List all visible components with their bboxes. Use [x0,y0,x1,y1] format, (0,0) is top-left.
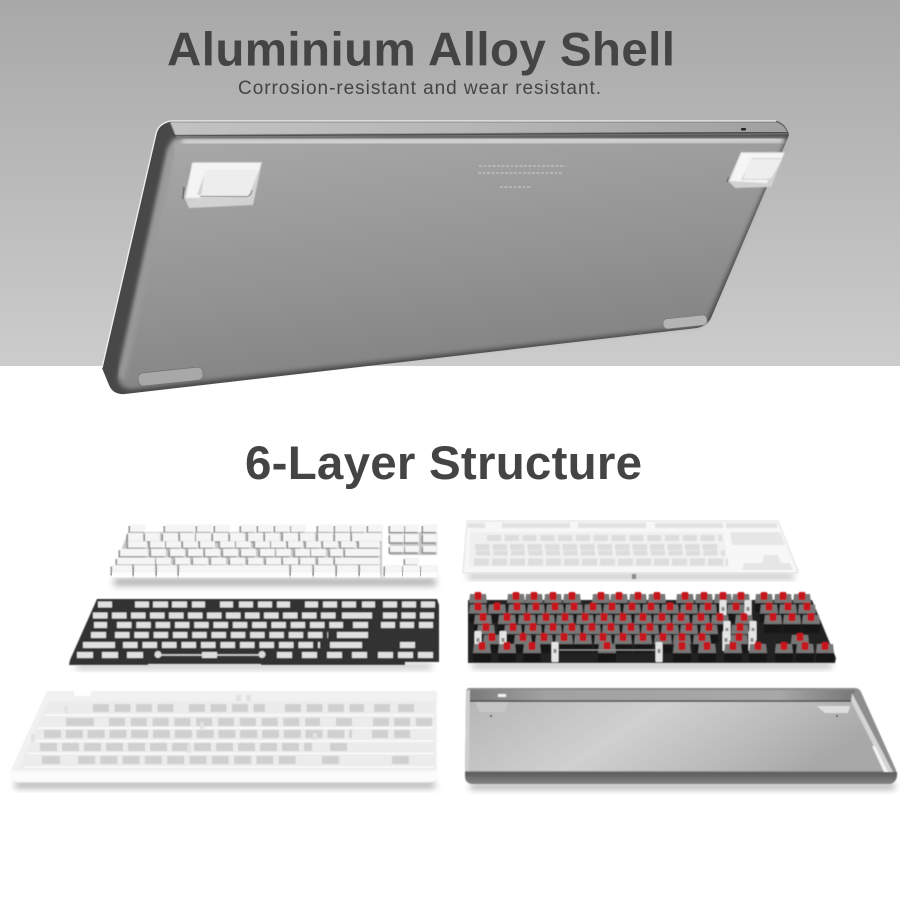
layer: white top frame [463,521,798,579]
heading: 6-layer structure: 6-Layer Structure [245,437,642,490]
switch row 4 [477,621,756,643]
aluminium keyboard underside [102,121,789,394]
switch row 3 [474,613,820,633]
frame key field [469,532,728,567]
left foot bracket [183,162,262,208]
tray notch [498,694,506,697]
layer: white bottom housing [10,691,437,788]
port notch [741,128,746,130]
tray back wall [469,690,855,701]
frame shadow [468,574,794,579]
PCB shadow [472,663,832,668]
spacebar slot [158,654,262,656]
tray front lip [465,772,897,784]
underside label [478,166,565,187]
housing posts [31,695,317,753]
rubber pad right [663,315,708,329]
frame connector [632,574,636,579]
housing body [10,691,437,782]
housing floor [19,701,435,769]
floor panel [118,138,787,389]
tray foot recess right [817,706,850,713]
layer: aluminium tray [465,688,897,789]
switch row 1 [469,592,811,612]
key base [112,532,437,575]
tray screw holes [490,715,492,717]
right foot bracket [727,152,785,188]
PCB board [468,600,836,663]
shell outline [102,121,789,394]
subtitle: Corrosion-resistant and wear resistant. [238,78,601,99]
tray shadow [470,784,895,789]
top light band [182,139,783,143]
tray foot recess left [475,702,508,712]
key gap shading [110,528,436,573]
frame body [463,521,798,573]
plate shadow [76,664,432,669]
tray outer [465,688,896,784]
tray right wall [851,693,893,772]
stabilizer wire [559,649,655,651]
grey background band [0,0,900,366]
tray left wall [465,690,470,771]
title: Aluminium Alloy Shell [167,24,675,76]
keycaps shadow [114,578,436,586]
housing holes [40,708,432,760]
tray floor [466,702,887,771]
housing ribs [24,715,434,767]
rubber pad left [138,367,204,386]
left inner band [121,148,172,378]
frame top cut-outs [468,523,777,528]
switch row 6 [473,642,834,662]
seam [174,132,788,136]
switch row 5 [474,631,809,653]
edge highlight [102,121,776,368]
housing front lip [10,771,437,782]
key fronts [112,572,437,578]
plate holes [77,604,435,655]
plate body [69,599,439,665]
frame nav cut-outs [730,532,793,570]
top rim [170,122,788,137]
switch row 2 [469,600,816,622]
housing shadow [15,782,435,788]
layer: switches on PCB [468,592,836,668]
layer: black steel plate [69,599,439,669]
layer: white keycaps [110,527,437,586]
key caps [112,527,437,572]
